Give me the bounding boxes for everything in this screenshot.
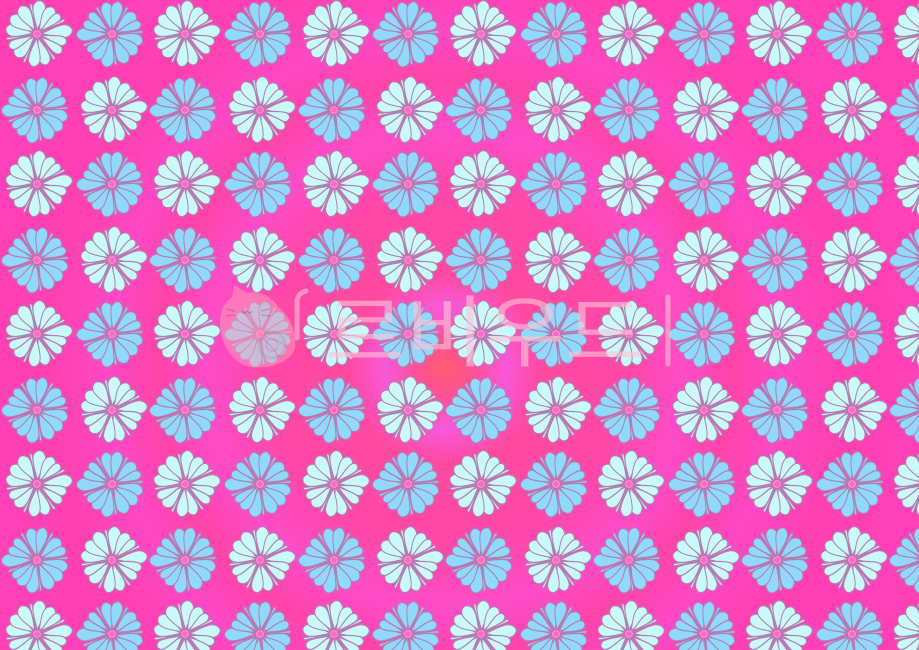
- watermark bracket right: [666, 297, 670, 364]
- watermark bracket left: [297, 291, 306, 338]
- watermark logo: [220, 285, 668, 377]
- watermark wordmark: 르비우드: [325, 289, 645, 377]
- icon: cat mascot: [220, 285, 295, 367]
